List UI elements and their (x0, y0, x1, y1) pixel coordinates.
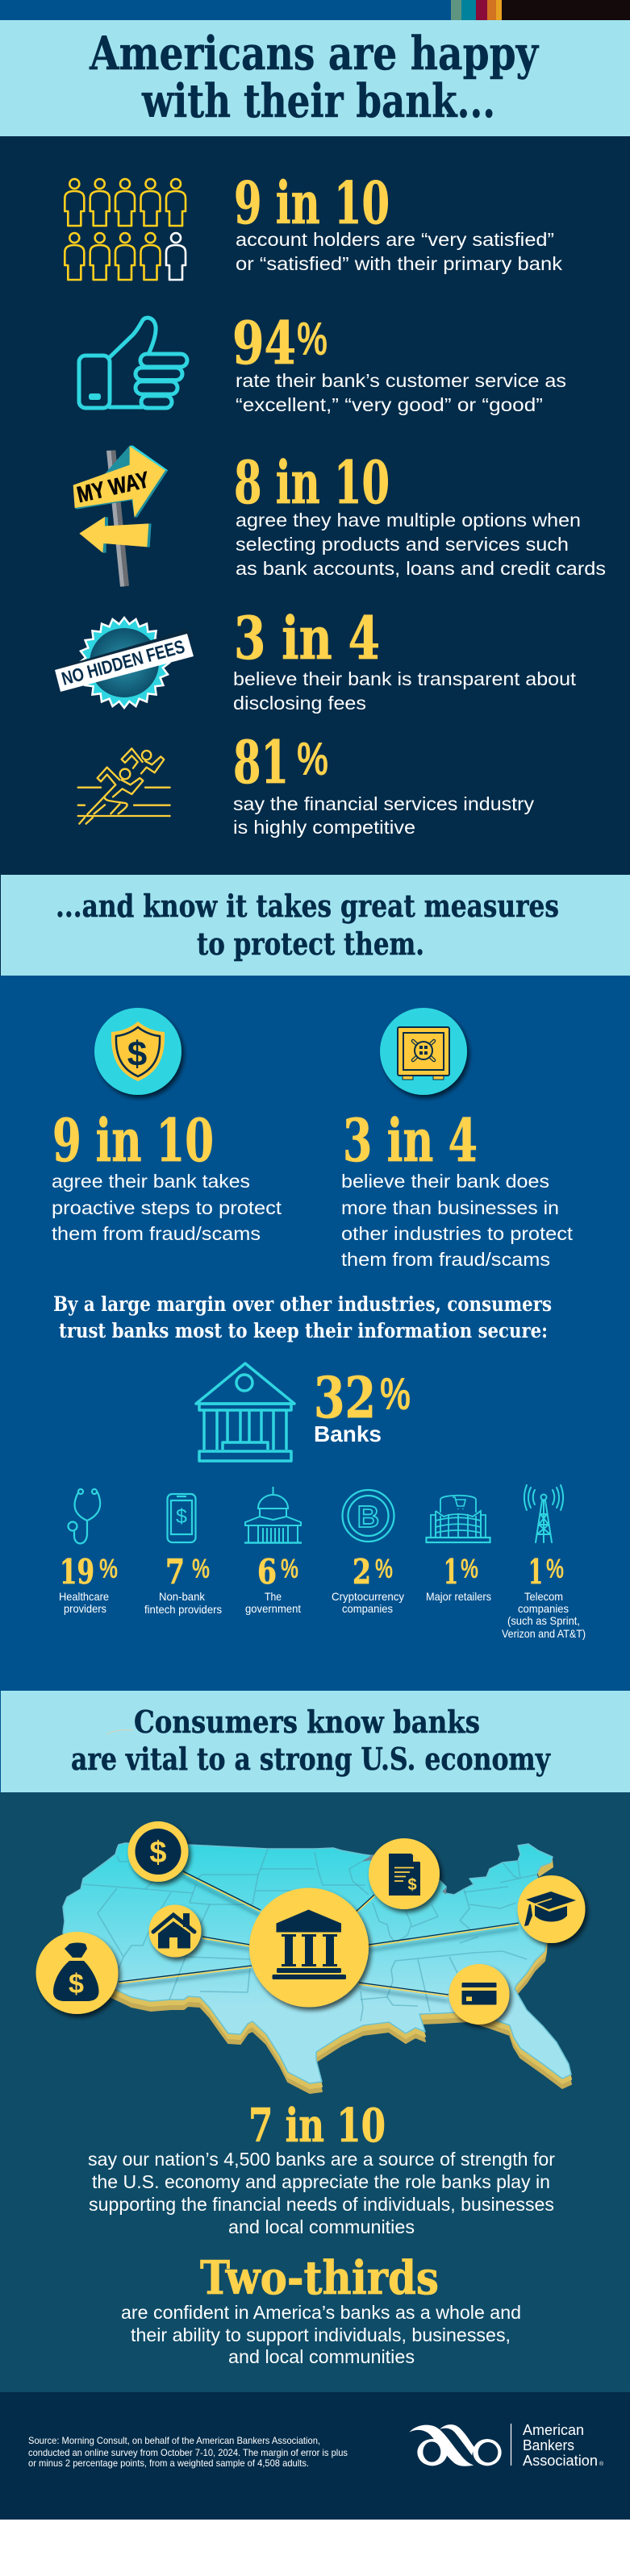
icon: safe (380, 1008, 467, 1095)
label (245, 1590, 301, 1615)
item: cryptocurrency companies (332, 1490, 404, 1615)
icon: shopping mall (426, 1496, 490, 1542)
stat: 7%: % (192, 1554, 210, 1584)
stat: 3 in 4 more than others: 3 in 4 (343, 1106, 478, 1176)
subheading: trust banks most (53, 1292, 552, 1342)
text: customer service: rate their bank’s customer service as (236, 370, 566, 391)
text: multiple options: as bank accounts, loans and credit cards (236, 558, 606, 579)
icon: no hidden fees badge: NO HIDDEN FEES (59, 635, 187, 689)
connector lines (119, 1871, 519, 2001)
icon: ten people, nine highlighted (65, 179, 186, 280)
icon: house (148, 1904, 202, 1958)
source note: or minus 2 percentage points, from a weighted sample of 4,508 adults. (28, 2457, 309, 2469)
stat: 1%: 1 (528, 1552, 543, 1592)
text: more than other industries (341, 1171, 574, 1270)
map: United States (63, 1843, 571, 2093)
label: Cryptocurrency (332, 1590, 404, 1603)
text: confident: are confident in America’s banks as a whole and (121, 2302, 521, 2323)
title: Americans are happy (89, 27, 540, 81)
stat: 94%: % (297, 313, 328, 365)
text: more than other industries: believe their bank does (341, 1171, 549, 1192)
stat: 2%: % (375, 1554, 393, 1584)
text: more than other industries: other industries to protect (341, 1223, 574, 1244)
icon: money bag (35, 1932, 118, 2014)
stat: 6%: % (281, 1554, 298, 1584)
text: confident (121, 2302, 521, 2367)
panel: satisfaction stats (0, 136, 630, 876)
panel: protection stats (0, 976, 630, 1691)
source note (28, 2435, 348, 2469)
label: Major retailers (426, 1590, 491, 1603)
text: proactive steps (52, 1171, 282, 1244)
stat: 6%: 6 (257, 1552, 277, 1592)
title: with their bank... (141, 74, 495, 128)
text: account holders: or “satisfied” with their primary bank (236, 253, 563, 274)
text: source of strength: supporting the financial needs of individuals, businesses (89, 2194, 554, 2215)
icon: central bank (249, 1888, 369, 2008)
text: account holders: account holders are “very satisfied” (236, 229, 554, 250)
stat: 1% (444, 1552, 478, 1592)
text: competitive: is highly competitive (233, 817, 415, 838)
text: transparent: disclosing fees (233, 693, 366, 714)
heading (56, 888, 559, 962)
label: Verizon and AT&T) (502, 1627, 586, 1640)
logo: American Bankers Association: Bankers (523, 2437, 574, 2453)
text: competitive: say the financial services industry (233, 793, 535, 814)
icon: document with dollar (369, 1838, 440, 1909)
text: source of strength (88, 2149, 555, 2237)
stat: 3 in 4: 3 in 4 (234, 604, 380, 673)
icon: thumbs up (79, 318, 187, 408)
stat: 7% (165, 1552, 210, 1592)
text: confident: their ability to support individuals, businesses, (131, 2324, 511, 2345)
icon: capitol (244, 1487, 302, 1543)
text: source of strength: say our nation’s 4,500 banks are a source of strength for (88, 2149, 555, 2170)
icon: bitcoin coin: B (357, 1500, 379, 1534)
text: more than other industries: more than businesses in (341, 1197, 559, 1218)
text: proactive steps: agree their bank takes (52, 1171, 250, 1192)
icon: cell tower (524, 1485, 563, 1542)
icon: my way sign post: MY WAY (75, 467, 152, 507)
stat: 19%: % (99, 1554, 118, 1584)
stat: 1%: 1 (444, 1552, 458, 1592)
label: fintech providers (144, 1603, 222, 1616)
text: customer service: “excellent,” “very good” or “good” (236, 394, 543, 415)
icon: money bag: $ (69, 1969, 84, 2000)
stat: 8 in 10: 8 in 10 (234, 448, 390, 518)
icon: dollar coin (127, 1821, 189, 1882)
text: more than other industries: them from fraud/scams (341, 1249, 550, 1270)
text: proactive steps: proactive steps to protect (52, 1197, 282, 1218)
stat: 19%: 19 (60, 1552, 94, 1592)
stat: 1%: % (461, 1554, 478, 1584)
panel: economy heading band (0, 1691, 630, 1792)
item: major retailers (426, 1496, 491, 1603)
text: source of strength: and local communities (228, 2216, 415, 2237)
heading: Consumers know banks (134, 1704, 480, 1740)
icon: my way sign post (73, 445, 168, 587)
stat: 32% banks: Banks (314, 1421, 382, 1446)
heading (71, 1704, 551, 1777)
text: competitive (233, 793, 535, 838)
label (502, 1590, 586, 1640)
label (332, 1590, 404, 1615)
label: (such as Sprint, (507, 1614, 580, 1627)
label: providers (64, 1602, 106, 1615)
text: source of strength: the U.S. economy and appreciate the role banks play in (92, 2171, 550, 2192)
icon: shield with dollar: $ (127, 1034, 147, 1074)
icon: bank building (196, 1363, 294, 1461)
stat: 81%: 81 (233, 728, 289, 797)
panel: protection heading band (0, 875, 630, 976)
text: proactive steps: them from fraud/scams (52, 1223, 261, 1244)
logo: American Bankers Association: ® (599, 2461, 604, 2467)
icon: runners (78, 748, 170, 824)
label (144, 1590, 222, 1616)
stat: 1% (528, 1552, 564, 1592)
text: account holders (236, 229, 563, 274)
stat: two-thirds: Two-thirds (200, 2251, 439, 2305)
stat: 32% banks (314, 1364, 411, 1446)
stat: 2%: 2 (353, 1552, 371, 1592)
logo: American Bankers Association: Association (523, 2453, 598, 2469)
text: confident: and local communities (228, 2346, 415, 2367)
stat: 1%: % (546, 1554, 564, 1584)
text: transparent (233, 668, 577, 714)
subheading: trust banks most: By a large margin over other industries, consumers (53, 1292, 552, 1316)
icon: graduation cap (518, 1875, 586, 1943)
item: non-bank fintech providers (144, 1494, 222, 1616)
stat: 9 in 10 proactive: 9 in 10 (52, 1106, 214, 1176)
stat: 9 in 10: 9 in 10 (234, 169, 390, 237)
item: telecom companies (502, 1485, 586, 1640)
icon: no hidden fees badge (55, 616, 194, 710)
label: The (265, 1590, 282, 1603)
logo: American Bankers Association (409, 2422, 604, 2469)
item: healthcare providers (59, 1489, 118, 1615)
source note: Source: Morning Consult, on behalf of the American Bankers Association, (28, 2435, 320, 2446)
heading: to protect them. (197, 926, 424, 962)
stat: 7%: 7 (165, 1552, 185, 1592)
icon: credit card (449, 1964, 510, 2025)
stat: 81%: % (297, 733, 328, 785)
icon: stethoscope (68, 1489, 100, 1543)
text: transparent: believe their bank is transparent about (233, 668, 577, 689)
label: Healthcare (59, 1590, 109, 1603)
label (59, 1590, 109, 1615)
icon: bitcoin coin (342, 1490, 394, 1542)
label: companies (518, 1602, 569, 1615)
icon: dollar coin: $ (149, 1836, 167, 1870)
text: multiple options (236, 510, 606, 579)
label: Telecom (524, 1590, 563, 1603)
stat: 6% (257, 1552, 298, 1592)
stat: 32% banks: % (380, 1368, 411, 1420)
text: multiple options: selecting products and services such (236, 534, 569, 555)
text: customer service (236, 370, 566, 415)
title (89, 27, 540, 128)
stat: 7 in 10: 7 in 10 (248, 2099, 386, 2153)
panel: economy (0, 1792, 630, 2392)
label: government (245, 1602, 301, 1615)
label: companies (342, 1602, 393, 1615)
subheading: trust banks most: trust banks most to keep their information secure: (59, 1319, 548, 1342)
top colour bar (0, 0, 630, 20)
label: Non-bank (159, 1590, 206, 1603)
logo: American Bankers Association: American (523, 2422, 584, 2438)
icon: phone (168, 1494, 195, 1542)
stat: 94%: 94 (232, 309, 296, 378)
panel: title band (0, 20, 630, 136)
icon: shield with dollar (94, 1008, 181, 1095)
stat: 2% (353, 1552, 393, 1592)
item: the government (244, 1487, 302, 1615)
icon: phone: $ (176, 1505, 187, 1528)
source note: conducted an online survey from October 7-10, 2024. The margin of error is plus (28, 2447, 348, 2458)
panel: footer (0, 2392, 630, 2520)
text: multiple options: agree they have multiple options when (236, 510, 581, 531)
icon: document with dollar: $ (407, 1876, 417, 1894)
stat: 32% banks: 32 (314, 1364, 376, 1431)
